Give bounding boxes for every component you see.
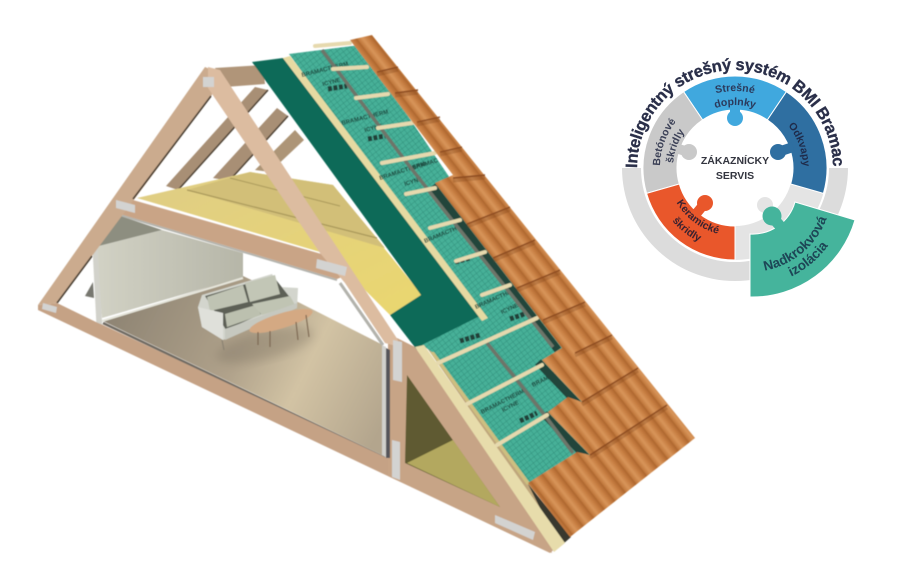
left rafter [38,67,212,305]
outer grey ring [622,168,848,281]
lower right wood frame with triangular void [382,338,557,553]
segment: Nadkrokvová izolácia: Nadkrokvová [763,216,827,270]
circular system diagram [622,58,854,296]
foil print: ICYNE [501,400,520,414]
foil print: BRAMACTHERM [301,62,349,79]
segment: Odkvapy: Odkvapy [790,122,809,166]
foil print: BRAMACTHERM [341,110,389,127]
dark gap beside tile edge [432,186,586,457]
segment: Strešné doplnky: doplnky [714,97,756,110]
tile course shadows [377,70,667,458]
segment: Nadkrokvová izolácia [750,202,854,296]
left rafter inner edge [57,96,211,303]
foil print: ICYNE [322,78,341,88]
foil print: ICYNE [404,177,423,188]
segment: Keramické škridly: škridly [673,216,702,242]
metal connector plates [42,77,535,540]
curved title: Inteligentný strešný systém BMI Bramac [626,58,842,168]
coffee table [247,304,315,347]
front rafter [208,67,398,346]
empty puzzle slot [735,184,823,260]
segment: Betónové škridly [643,92,703,192]
segment: Odkvapy [767,92,827,194]
foil print: BRAMAC [531,371,558,389]
segment: Strešné doplnky: Strešné [715,83,755,93]
roof cross-section illustration [38,35,695,553]
foil print: ICYNE [500,303,520,316]
segment: Strešné doplnky [684,76,786,126]
ceiling [95,215,162,247]
sofa [198,274,298,350]
tile course lines [377,67,667,455]
counter battens [322,50,573,453]
foil print: BRAMACTHERM [480,389,526,416]
segment: Keramické škridly: Keramické [676,199,720,234]
foil print: BRAMACTHERM [424,221,470,245]
room interior [85,214,386,458]
foil print [301,62,558,416]
bottom beam [38,303,552,553]
segment: Betónové škridly: škridly [666,128,684,163]
green sarking board [252,58,482,350]
foil print: BRAMAC [412,158,440,172]
segment: Keramické škridly [647,184,736,260]
tile battens [315,43,547,445]
roof tiles [350,35,695,537]
foil print: ICYNE [364,124,383,134]
segment: Nadkrokvová izolácia: izolácia [788,242,828,276]
foil logo marks [328,86,537,421]
floor shadow under furniture [213,319,317,371]
centre label: SERVIS [716,170,754,182]
foil print: BRAMACTHERM [379,161,426,182]
foil print: BRAMACTHERM [474,286,521,311]
back rafters and ridge beam [166,65,304,190]
ceiling beam [117,200,347,279]
dark eave underside [528,484,571,545]
underlay foil with grid [289,45,600,483]
mineral wool insulation [137,172,422,315]
floor [103,276,386,457]
segment: Betónové škridly: Betónové [652,118,676,166]
centre label: ZÁKAZNÍCKY [701,154,769,167]
eave wood band [425,345,562,542]
cream edge strips [283,56,565,552]
back wall [95,230,243,318]
